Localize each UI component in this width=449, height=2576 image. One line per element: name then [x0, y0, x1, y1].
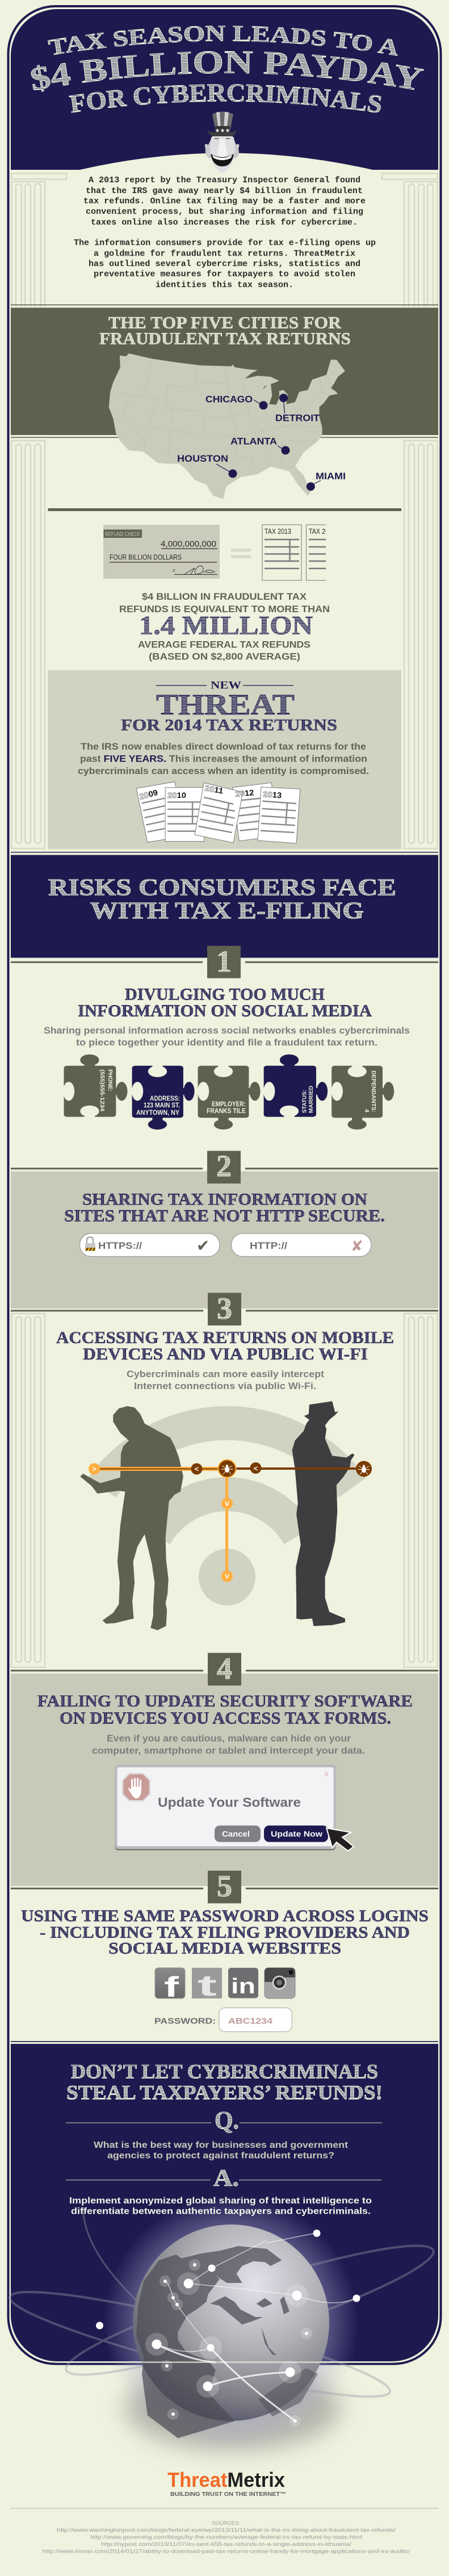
network attack diagram — [89, 1460, 372, 1582]
tax form stack: 2010 — [167, 791, 186, 800]
panel: new threat — [48, 670, 401, 849]
globe — [133, 2224, 329, 2438]
panel: risk 4: Even if you are cautious, malware can hide on your — [107, 1733, 351, 1743]
label: atlanta: ATLANTA — [230, 436, 277, 447]
puzzle piece: status: STATUS: — [301, 1090, 308, 1113]
closing heading — [66, 2060, 383, 2104]
map: united states — [109, 353, 345, 499]
icon: twitter — [192, 1968, 222, 2002]
intro text: preventative measures for taxpayers to avoid stolen — [94, 269, 355, 279]
heading: top five cities: FRAUDULENT TAX RETURNS — [99, 329, 351, 348]
panel bottom edge — [57, 2361, 392, 2363]
globe shadow — [125, 2365, 341, 2450]
http address bar — [232, 1233, 371, 1256]
network attack diagram: < — [254, 1464, 258, 1473]
intro text: convenient process, but sharing information and filing — [86, 207, 363, 217]
icon: twitter: t — [198, 1969, 217, 2002]
panel: risk 2: 2 — [216, 1149, 232, 1183]
risk 5: heading: SOCIAL MEDIA WEBSITES — [108, 1939, 341, 1958]
panel: risk 4 — [11, 1651, 438, 1886]
number badge 3 — [11, 1291, 438, 1325]
icon: linkedin — [228, 1968, 258, 1998]
header panel — [11, 9, 438, 170]
icon: linkedin: in — [231, 1975, 255, 1998]
columns: section three — [11, 1314, 437, 1667]
network attack diagram: < — [195, 1465, 199, 1473]
equals sign — [231, 549, 251, 558]
icon: wi-fi signal — [102, 1423, 353, 1605]
orbits — [5, 2209, 441, 2422]
network lines on globe — [157, 2233, 356, 2421]
heading: top five cities — [99, 313, 351, 348]
risk 3: heading and text: Internet connections via public Wi-Fi. — [134, 1381, 316, 1391]
silhouette: person with phone — [80, 1406, 183, 1630]
sources: http://www.inman.com/2014/01/27/ability-to-download-past-tax-returns-online-handy-for-mortgage-applications-and-irs-audits/ — [43, 2549, 410, 2554]
risk 5: heading: USING THE SAME PASSWORD ACROSS LOGINS — [21, 1907, 429, 1925]
http address bar: ✘ — [351, 1238, 363, 1255]
intro text: tax refunds. Online tax filing may be a faster and more — [83, 196, 366, 206]
panel: risk 2 — [11, 1149, 438, 1308]
network nodes — [96, 2230, 360, 2427]
panel: risk 4: computer, smartphone or tablet and intercept your data. — [92, 1746, 365, 1756]
intro text: has outlined several cybercrime risks, statistics and — [89, 259, 360, 269]
password field: PASSWORD: — [154, 2016, 216, 2026]
sources: http://www.washingtonpost.com/blogs/federal-eye/wp/2013/11/11/what-is-the-irs-doing-about-fraudulent-tax-refunds/ — [57, 2527, 396, 2533]
title: TAX SEASON LEADS TO A — [48, 26, 397, 56]
columns: section one — [11, 174, 438, 307]
intro text: taxes online also increases the risk for cybercrime. — [91, 218, 358, 227]
intro text: identities this tax season. — [156, 281, 293, 290]
sources: http://nypost.com/2013/11/07/irs-sent-655-tax-refunds-to-a-single-address-in-lithuania/ — [101, 2541, 351, 2548]
answer — [66, 2165, 381, 2216]
network attack diagram: V — [225, 1500, 229, 1508]
panel: new threat: THREAT — [156, 689, 295, 721]
https address bar: HTTPS:// — [98, 1240, 142, 1251]
refund check: X — [173, 569, 175, 573]
update dialog — [115, 1764, 354, 1851]
number badge 5 — [11, 1869, 438, 1904]
puzzle piece: address: 123 MAIN ST. — [144, 1101, 180, 1109]
closing heading: STEAL TAXPAYERS’ REFUNDS! — [66, 2081, 383, 2104]
tax form stack: 2012 — [235, 788, 254, 798]
tax form stack — [136, 782, 300, 843]
icon: facebook: f — [164, 1971, 179, 2003]
panel: risk 4: 4 — [217, 1651, 232, 1686]
label: atlanta — [230, 436, 289, 454]
tax form clipped — [306, 525, 326, 580]
puzzle piece: address: ADDRESS: — [150, 1094, 180, 1102]
panel: risks heading: RISKS CONSUMERS FACE — [48, 875, 396, 901]
globe halo — [103, 2195, 359, 2450]
puzzle piece: phone: PHONE: — [107, 1069, 113, 1092]
panel: new threat: NEW — [211, 679, 241, 692]
tax form 2013 — [262, 525, 301, 580]
statistic: 1.4 million: (BASED ON $2,800 AVERAGE) — [149, 651, 300, 662]
tax form stack: 2009 — [139, 788, 159, 801]
risk 1: heading and text: DIVULGING TOO MUCH — [125, 985, 325, 1004]
intro text — [74, 175, 376, 290]
answer: Implement anonymized global sharing of threat intelligence to — [69, 2196, 372, 2206]
network attack diagram: V — [225, 1573, 229, 1580]
panel: risk 2: SHARING TAX INFORMATION ON — [82, 1190, 367, 1208]
risk 5: heading: - INCLUDING TAX FILING PROVIDERS AND — [40, 1923, 410, 1942]
intro text: A 2013 report by the Treasury Inspector General found — [89, 175, 360, 185]
answer: A. — [213, 2165, 239, 2192]
risk 1: heading and text: to piece together your identity and file a fraudulent tax return. — [76, 1038, 377, 1048]
risk 1: heading and text: INFORMATION ON SOCIAL MEDIA — [78, 1001, 372, 1020]
panel: risk 2: SITES THAT ARE NOT HTTP SECURE. — [64, 1206, 385, 1226]
label: miami — [307, 471, 346, 491]
statistic: 1.4 million: 1.4 MILLION — [139, 611, 313, 641]
puzzle piece: employer: FRANKS TILE — [207, 1107, 246, 1115]
tax form clipped: TAX 2013 — [309, 527, 335, 536]
risk 3: heading and text: ACCESSING TAX RETURNS ON MOBILE — [56, 1328, 394, 1347]
panel: risk 4: ON DEVICES YOU ACCESS TAX FORMS. — [60, 1709, 391, 1728]
https address bar: ✔ — [196, 1236, 209, 1255]
sources — [43, 2520, 410, 2554]
password field — [154, 2008, 292, 2032]
statistic: 1.4 million — [119, 591, 330, 662]
puzzle piece: address: ANYTOWN, NY — [136, 1109, 179, 1116]
logo: threatmetrix: BUILDING TRUST ON THE INTERNET™ — [170, 2491, 286, 2498]
panel: top five cities — [11, 304, 438, 438]
puzzle piece: employer — [197, 1065, 261, 1130]
label: houston: HOUSTON — [177, 453, 228, 464]
puzzle piece: dependants — [331, 1065, 394, 1130]
footer rule — [11, 2508, 438, 2509]
label: miami: MIAMI — [316, 471, 346, 482]
panel: closing — [11, 2041, 438, 2361]
refund check: 4,000,000,000 — [161, 540, 216, 549]
update dialog: X — [324, 1770, 329, 1778]
risk 5: heading — [21, 1907, 429, 1958]
label: detroit — [275, 394, 320, 424]
icon: instagram — [265, 1968, 295, 1998]
number badge 3: 3 — [217, 1291, 232, 1325]
columns: section two — [11, 441, 437, 848]
puzzle piece: dependants: 4 — [363, 1109, 370, 1113]
panel: new threat: cybercriminals can access when an identity is compromised. — [78, 766, 369, 776]
puzzle piece: dependants: DEPENDANTS: — [370, 1070, 376, 1113]
panel: risks heading: WITH TAX E-FILING — [90, 898, 364, 925]
puzzle piece: employer: EMPLOYER: — [212, 1100, 246, 1108]
sources: http://www.governing.com/blogs/by-the-numbers/average-federal-irs-tax-refund-by-state.html — [90, 2534, 362, 2541]
question: What is the best way for businesses and government — [94, 2140, 348, 2150]
silhouette: man in hat — [292, 1401, 355, 1626]
question: agencies to protect against fraudulent returns? — [107, 2151, 334, 2160]
http address bar: HTTP:// — [250, 1240, 287, 1251]
panel: risk 4: FAILING TO UPDATE SECURITY SOFTWARE — [37, 1692, 413, 1711]
puzzle piece: phone — [63, 1055, 128, 1118]
label: chicago: CHICAGO — [205, 394, 253, 404]
number badge 5: 5 — [217, 1869, 232, 1903]
statistic: 1.4 million: $4 BILLION IN FRAUDULENT TAX — [142, 591, 307, 602]
question — [66, 2106, 382, 2160]
tax form 2013: TAX 2013 — [265, 527, 291, 536]
title: FOR CYBERCRIMINALS — [69, 84, 381, 113]
refund check: REFUND CHECK — [105, 531, 140, 538]
risk 3: heading and text — [56, 1328, 394, 1391]
statistic: 1.4 million: REFUNDS IS EQUIVALENT TO MORE THAN — [119, 604, 330, 614]
intro text: The information consumers provide for tax e-filing opens up — [74, 239, 376, 248]
refund check: FOUR BILLION DOLLARS — [110, 553, 182, 561]
panel: risks heading — [11, 852, 438, 957]
heading: top five cities: THE TOP FIVE CITIES FOR — [108, 313, 341, 332]
tax form stack: 2011 — [204, 783, 224, 796]
sources: SOURCES: — [212, 2520, 240, 2527]
icon: facebook — [155, 1968, 185, 2003]
password field: ABC1234 — [228, 2016, 273, 2026]
panel: new threat: The IRS now enables direct download of tax returns for the — [81, 742, 366, 752]
label: detroit: DETROIT — [275, 413, 320, 424]
refund check — [103, 525, 220, 579]
number badge 1: 1 — [216, 944, 232, 978]
number badge 1 — [11, 944, 438, 978]
statistic: 1.4 million: AVERAGE FEDERAL TAX REFUNDS — [138, 639, 310, 650]
risk 1: heading and text — [44, 985, 410, 1048]
label: chicago — [205, 394, 268, 409]
icon: uncle sam — [205, 111, 239, 173]
risk 3: heading and text: Cybercriminals can more easily intercept — [127, 1369, 325, 1379]
closing heading: DON’T LET CYBERCRIMINALS — [71, 2060, 378, 2083]
panel: new threat: past FIVE YEARS. This increases the amount of information — [80, 754, 367, 764]
puzzle piece: phone: (555)555-1234 — [99, 1069, 105, 1111]
intro text: that the IRS gave away nearly $4 billion in fraudulent — [86, 186, 363, 196]
risk 1: heading and text: Sharing personal information across social networks enables cybercriminals — [44, 1026, 410, 1036]
puzzle piece: status — [263, 1055, 328, 1118]
puzzle piece: address — [131, 1065, 195, 1130]
update dialog: Cancel — [222, 1829, 250, 1838]
title: $4 BILLION PAYDAY — [31, 51, 424, 92]
update dialog: Update Now — [271, 1829, 322, 1838]
network attack diagram: > — [92, 1465, 96, 1473]
risk 3: heading and text: DEVICES AND VIA PUBLIC WI-FI — [83, 1345, 368, 1364]
title — [31, 26, 424, 113]
label: houston — [177, 453, 237, 478]
tax form stack: 2013 — [263, 789, 282, 800]
puzzle piece: status: MARRIED — [308, 1086, 314, 1113]
https address bar — [79, 1233, 220, 1256]
update dialog: Update Your Software — [158, 1795, 301, 1809]
question: Q. — [215, 2106, 239, 2134]
intro text: a goldmine for fraudulent tax returns. ThreatMetrix — [94, 249, 355, 259]
answer: differentiate between authentic taxpayers and cybercriminals. — [71, 2207, 371, 2216]
panel: new threat: FOR 2014 TAX RETURNS — [121, 716, 337, 734]
icon: uncle sam: ★★★ — [215, 128, 230, 134]
logo: threatmetrix: ThreatMetrix — [167, 2468, 285, 2491]
divider bar — [48, 508, 401, 511]
